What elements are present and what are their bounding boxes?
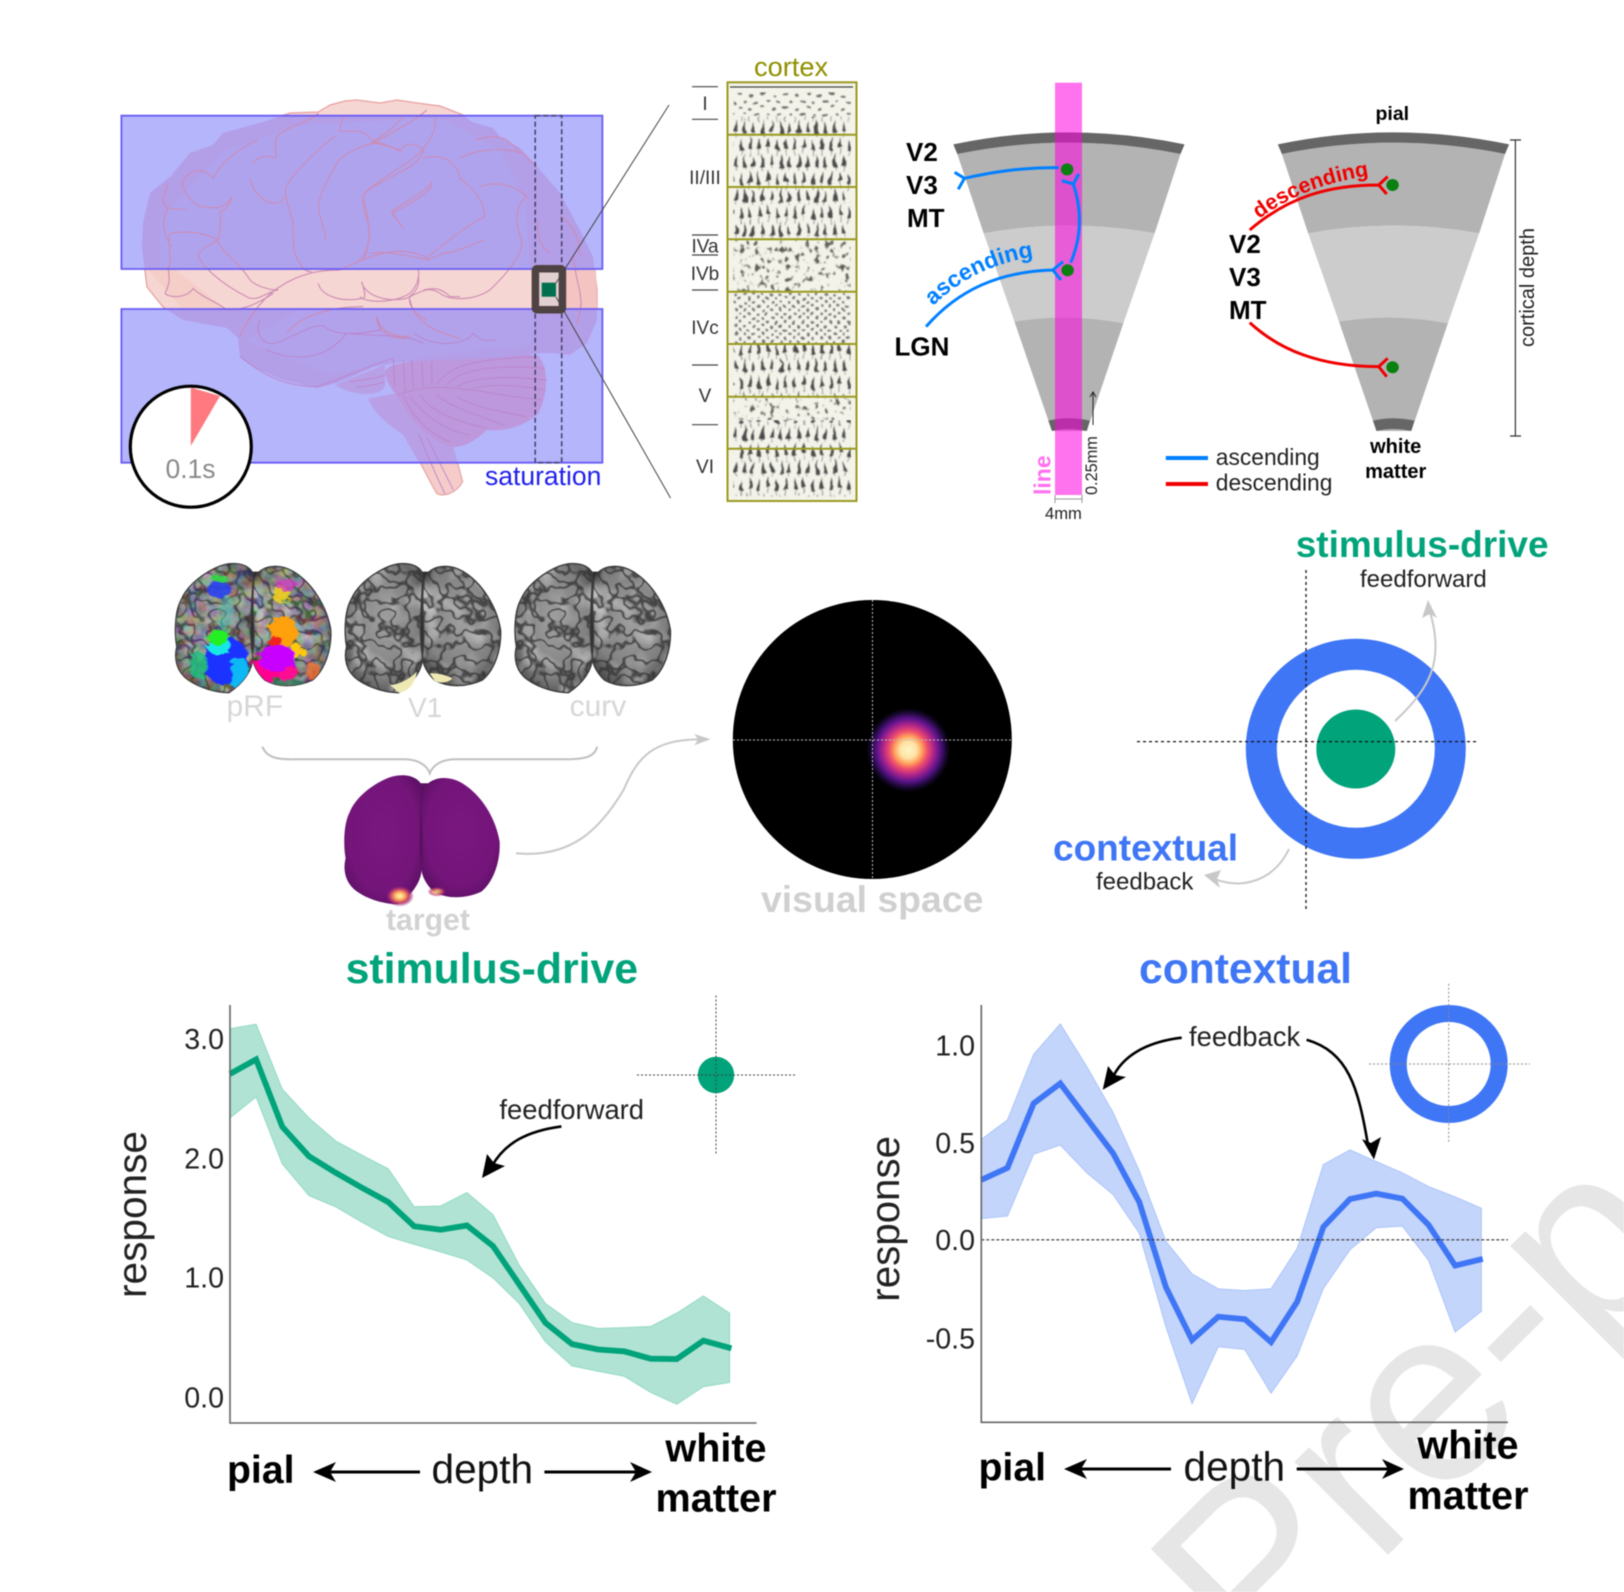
arrow: right [1297,1459,1404,1479]
saturation band top [121,116,602,269]
y ticks [184,1024,224,1414]
depth bracket [1510,140,1521,436]
crosshair [1137,570,1478,909]
y label: response [862,1136,908,1302]
dashed column [535,116,562,463]
inset: ring [1369,984,1530,1144]
timer: 0.1s [165,454,216,484]
brain: pRF [169,560,337,697]
curved label: descending: descending [1254,164,1368,218]
pink line profile [1055,83,1082,495]
label: 4mm: 4mm [1045,504,1082,523]
layer labels [689,87,721,478]
legend: ascending [1216,444,1320,470]
panel: stimulus schematic [1053,524,1549,909]
axes [230,1005,757,1423]
curved label: ascending: ascending [926,244,1033,305]
y label: response [109,1131,155,1298]
label: LGN: LGN [894,332,949,362]
label: 0.25mm: 0.25mm [1083,436,1101,495]
illustration: brain [142,100,597,495]
panel: ascending wedge [894,82,1185,523]
brain: V1 [339,560,506,697]
area labels: V2 V3 MT: V3 [906,170,938,200]
confidence band [230,1024,730,1404]
area labels: V2 V3 MT: MT [907,203,945,233]
voxel box [535,269,562,310]
arrow: feedback left [1103,1038,1182,1090]
red pathways [1250,177,1388,377]
panel: surface maps [169,560,711,937]
green neurons [1061,163,1074,276]
panel: visual space [733,600,1012,920]
label: target: target [386,904,470,937]
sulci: temporal and cerebellum [240,317,547,494]
sulci: occipital [360,115,581,338]
title: contextual [1139,945,1352,993]
x label: white matter: white [664,1426,767,1470]
y ticks: 1.0 [184,1262,224,1294]
brain: curv [509,560,676,697]
area labels: V2 V3 MT [906,137,945,233]
label: white matter [1365,436,1426,483]
brain: target [344,775,500,907]
label: white matter: white [1369,436,1421,458]
timer [130,386,251,507]
wedge: ascending [953,132,1185,431]
y ticks: 0.0 [935,1225,975,1257]
y ticks: 0.5 [935,1128,975,1160]
sulci: frontal [163,110,460,338]
brace [262,747,597,773]
panel: cortex layers [689,51,856,501]
label: V1: V1 [408,692,442,723]
blue ring [1261,654,1450,843]
arrow: left [1064,1459,1171,1479]
label: curv: curv [570,690,626,723]
panel: descending wedge [1165,103,1539,496]
y ticks: 1.0 [935,1031,975,1063]
confidence band [981,1024,1481,1404]
x label: depth: depth [432,1446,533,1492]
mean line [230,1059,731,1359]
small arrow [1090,392,1096,425]
x label: pial: pial [978,1446,1046,1490]
legend: descending [1216,470,1332,496]
arrow: feedback right [1307,1040,1381,1160]
annotation: feedback: feedback [1189,1021,1300,1052]
x label: white matter: matter [1408,1474,1528,1518]
panel: stimulus-drive chart [109,945,797,1520]
arrow: feedforward [1395,600,1437,721]
layer labels: VI [696,457,714,478]
brain under bottom band [166,309,597,463]
histology column [728,82,856,501]
area labels: V2 V3 MT [1229,229,1267,325]
green voxel [542,283,556,297]
inset: disc [637,996,797,1154]
label: pial: pial [1376,103,1409,125]
area labels: V2 V3 MT: MT [1229,295,1267,325]
layer labels: IVa [691,236,719,258]
x label: white matter [656,1426,776,1520]
arrow: feedback [1204,849,1289,888]
layer labels: I [702,94,708,115]
layer labels: IVc [691,318,719,339]
x label: white matter: white [1416,1424,1519,1468]
green neurons [1386,179,1399,373]
label: white matter: matter [1365,461,1426,483]
label: feedforward: feedforward [1360,566,1487,593]
y ticks [926,1031,975,1356]
saturation band bottom [121,309,602,463]
area labels: V2 V3 MT: V2 [906,137,938,167]
area labels: V2 V3 MT: V2 [1229,229,1261,259]
x label: pial: pial [227,1449,295,1492]
y ticks: 2.0 [184,1144,224,1176]
layer labels: V [699,386,712,407]
blue pathways [926,168,1079,327]
x label: depth: depth [1184,1444,1285,1490]
layer labels: IVb [691,264,719,285]
crosshair [733,600,1011,879]
label: feedback: feedback [1096,869,1194,896]
label: 4mm [1045,495,1082,523]
y ticks: 3.0 [184,1024,224,1056]
x label: white matter [1408,1424,1528,1518]
green disc [1316,710,1395,788]
wedge: descending [1278,132,1509,431]
title: stimulus-drive [346,945,638,993]
y ticks: -0.5 [926,1324,975,1356]
arrow: left [313,1462,420,1482]
arrow: target to visual space [516,734,711,854]
arrow: right [544,1462,652,1482]
legend [1166,444,1332,496]
pRF glow [866,708,950,792]
axes [981,1005,1508,1422]
panel: brain saturation [121,100,670,507]
heading: contextual: contextual [1053,828,1238,869]
label: cortical depth: cortical depth [1517,228,1539,347]
area labels: V2 V3 MT: V3 [1229,262,1261,292]
annotation: feedforward: feedforward [499,1094,644,1125]
x label: white matter: matter [656,1476,776,1520]
band outlines [121,116,602,463]
label: visual space: visual space [761,878,983,920]
label: saturation: saturation [485,461,601,491]
zero line [981,1239,1508,1241]
label: pRF: pRF [226,690,283,723]
zoom lines [556,105,670,498]
heading: stimulus-drive: stimulus-drive [1296,524,1549,565]
arrow: feedforward [482,1126,561,1178]
brain under top band [142,116,594,269]
panel: contextual chart [862,945,1530,1518]
label: line: line [1030,455,1056,495]
mean line [981,1083,1483,1342]
layer labels: II/III [689,168,721,189]
heading: cortex: cortex [754,51,828,82]
black disc [733,600,1012,879]
y ticks: 0.0 [184,1382,224,1414]
